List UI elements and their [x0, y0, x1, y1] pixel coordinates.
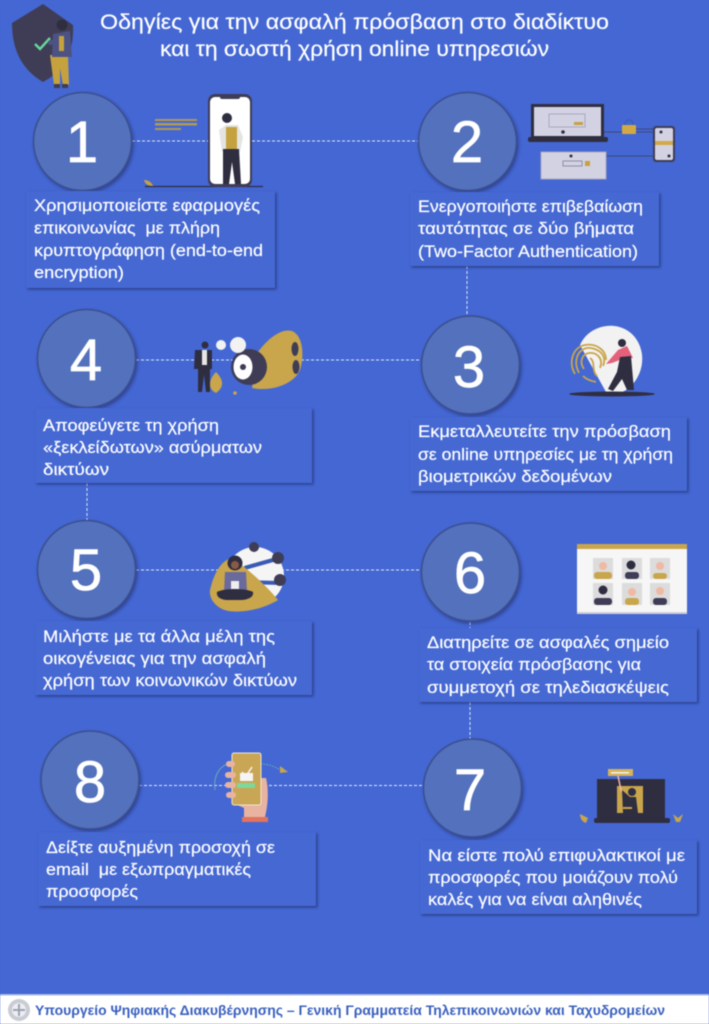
- icon: video conference window: [577, 544, 687, 614]
- number circle 6: [422, 523, 520, 621]
- text box 3: Εκμεταλλευτείτε την πρόσβαση: [418, 422, 671, 441]
- number circle 4: 4: [70, 328, 102, 393]
- text box 6: Διατηρείτε σε ασφαλές σημείο: [427, 633, 669, 652]
- title: [100, 11, 609, 61]
- text box 4: [35, 408, 312, 483]
- text box 4: δικτύων: [43, 460, 109, 479]
- number circle 8: [41, 731, 139, 829]
- text box 2: (Two-Factor Authentication): [418, 242, 638, 261]
- text box 8: [38, 832, 316, 906]
- step 4: [35, 310, 312, 483]
- text box 8: email με εξωπραγματικές: [46, 860, 251, 879]
- text box 1: [26, 191, 275, 288]
- icon: laptop with person and sign: [580, 769, 683, 823]
- text box 6: τα στοιχεία πρόσβασης για: [427, 655, 641, 674]
- text box 7: Να είστε πολύ επιφυλακτικοί με: [428, 846, 685, 865]
- icon: phone with person: [144, 94, 263, 187]
- text box 1: επικοινωνίας με πλήρη: [34, 218, 220, 238]
- number circle 1: [34, 92, 132, 190]
- number circle 2: [418, 92, 516, 190]
- text box 8: προσφορές: [46, 882, 138, 901]
- step 1: [26, 92, 275, 288]
- number circle 7: 7: [454, 758, 486, 823]
- icon: shield with person: [12, 4, 73, 88]
- number circle 5: 5: [70, 538, 102, 603]
- icon: woman with social media: [210, 542, 286, 612]
- text box 5: Μιλήστε με τα άλλα μέλη της: [43, 627, 275, 646]
- text box 6: συμμετοχή σε τηλεδιασκέψεις: [427, 678, 669, 697]
- step 6: [419, 523, 697, 702]
- number circle 5: [38, 520, 136, 618]
- text box 3: [410, 417, 687, 491]
- text box 2: [410, 192, 659, 266]
- text box 1: encryption): [34, 263, 124, 282]
- number circle 7: [424, 739, 522, 837]
- number circle 3: 3: [453, 335, 485, 400]
- text box 3: βιομετρικών δεδομένων: [418, 467, 612, 486]
- text box 8: Δείξτε αυξημένη προσοχή σε: [46, 838, 275, 857]
- text box 7: καλές για να είναι αληθινές: [428, 890, 642, 909]
- text box 5: [35, 621, 312, 695]
- number circle 3: [422, 316, 520, 414]
- icon: devices with two-factor lock: [528, 104, 675, 179]
- text box 2: ταυτότητας σε δύο βήματα: [418, 219, 634, 238]
- number circle 2: 2: [451, 110, 483, 175]
- number circle 4: [38, 310, 136, 408]
- step 8: [38, 731, 316, 906]
- text box 5: οικογένειας για την ασφαλή: [43, 649, 266, 668]
- ministry name: Υπουργείο Ψηφιακής Διακυβέρνησης – Γενική Γραμματεία Τηλεπικοινωνιών και Ταχυδρομείων: [35, 1002, 665, 1018]
- connector lines: [87, 141, 470, 786]
- text box 1: Χρησιμοποιείστε εφαρμογές: [34, 196, 260, 215]
- number circle 1: 1: [66, 110, 98, 175]
- title: Οδηγίες για την ασφαλή πρόσβαση στο διαδίκτυο: [100, 11, 609, 34]
- icon: hand holding phone with email: [215, 753, 288, 822]
- step 5: [35, 520, 312, 695]
- text box 2: Ενεργοποιήστε επιβεβαίωση: [418, 197, 643, 216]
- step 3: [410, 316, 687, 491]
- number circle 6: 6: [454, 541, 486, 606]
- icon: Greek state emblem: [8, 999, 30, 1021]
- text box 1: κρυπτογράφηση (end-to-end: [34, 241, 263, 260]
- step 7: [420, 739, 697, 914]
- step 2: [410, 92, 675, 266]
- icon: fingerprint with walking woman: [569, 326, 655, 396]
- icon: man with wifi blob: [194, 330, 302, 395]
- text box 5: χρήση των κοινωνικών δικτύων: [43, 671, 297, 690]
- text box 6: [419, 628, 697, 702]
- text box 7: [420, 840, 697, 914]
- text box 4: Αποφεύγετε τη χρήση: [43, 416, 219, 435]
- text box 3: σε online υπηρεσίες με τη χρήση: [418, 445, 673, 464]
- text box 4: «ξεκλείδωτων» ασύρματων: [43, 438, 262, 457]
- title: και τη σωστή χρήση online υπηρεσιών: [160, 38, 549, 61]
- footer: [0, 994, 709, 1024]
- text box 7: προσφορές που μοιάζουν πολύ: [428, 868, 678, 887]
- number circle 8: 8: [74, 750, 106, 815]
